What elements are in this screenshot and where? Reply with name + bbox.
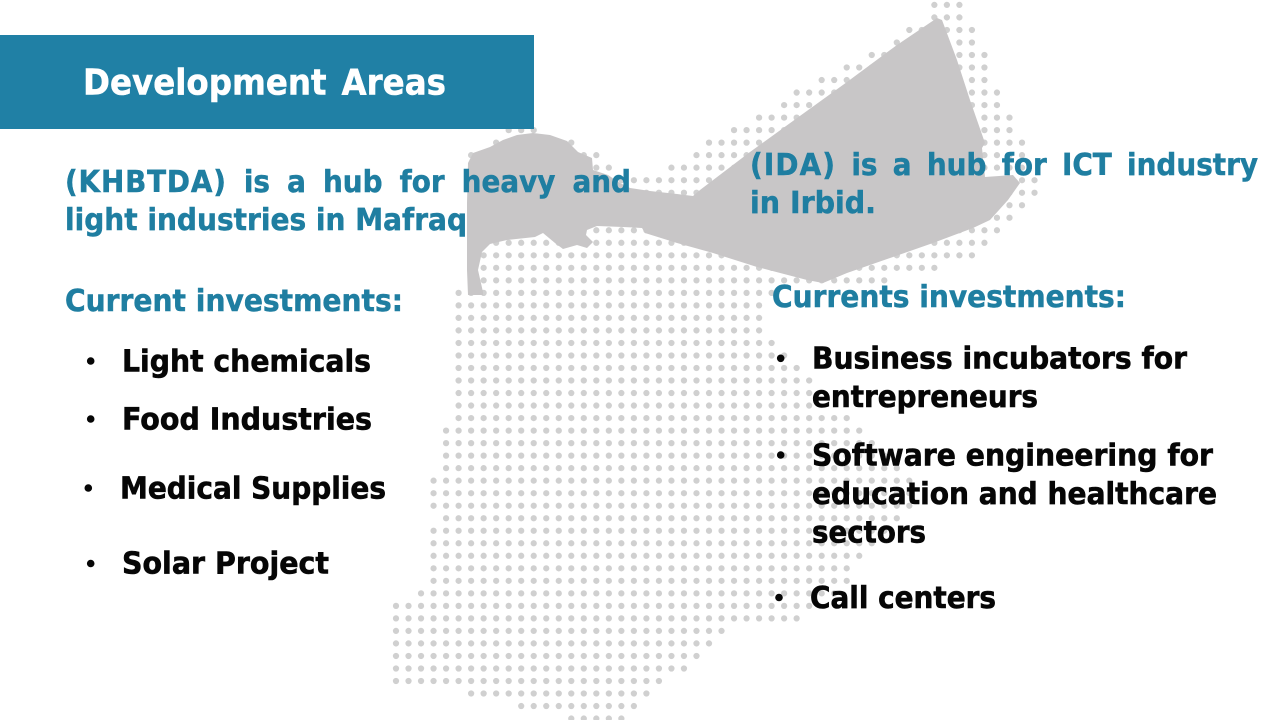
highlighted region: Mafraq to Irbid — [467, 18, 1020, 295]
text block: KHBTDA description: (KHBTDA) is a hub for heavy and — [65, 165, 631, 200]
list: Mafraq investments: Food Industries — [122, 402, 372, 438]
list: Mafraq investments: Solar Project — [122, 546, 329, 582]
title: Development Areas — [83, 62, 446, 104]
list: Irbid investments: Software engineering for — [812, 438, 1213, 474]
text block: IDA description: in Irbid. — [750, 186, 876, 221]
heading: current investments right: Currents investments: — [772, 280, 1126, 315]
list: Irbid investments: entrepreneurs — [812, 380, 1038, 415]
header banner — [0, 35, 534, 129]
list: Irbid investments: education and healthcare — [812, 477, 1217, 512]
list: Irbid investments: Business incubators for — [812, 342, 1187, 376]
list: Mafraq investments — [84, 344, 386, 582]
text block: KHBTDA description — [65, 165, 631, 238]
heading: current investments left: Current investments: — [65, 284, 403, 319]
list: Irbid investments: sectors — [812, 516, 926, 550]
list: Mafraq investments: Light chemicals — [122, 344, 371, 380]
list: Irbid investments — [775, 342, 1217, 616]
list: Irbid investments: Call centers — [810, 581, 996, 616]
text block: IDA description: (IDA) is a hub for ICT industry — [750, 148, 1258, 183]
dotted map of Jordan — [396, 5, 1035, 719]
text block: IDA description — [750, 148, 1258, 221]
text block: KHBTDA description: light industries in Mafraq — [65, 203, 467, 238]
list: Mafraq investments: Medical Supplies — [120, 472, 386, 506]
